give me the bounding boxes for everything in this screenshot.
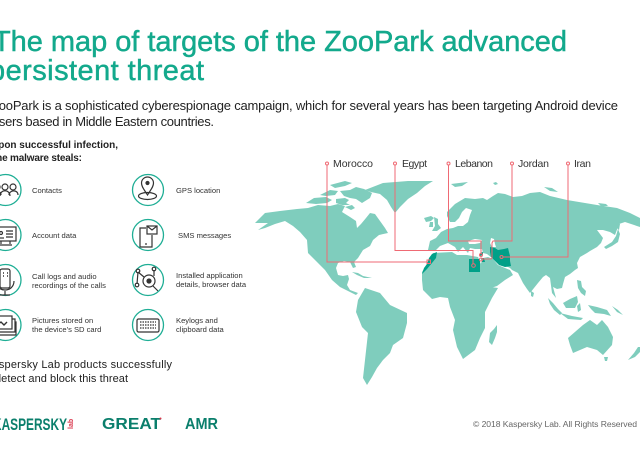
Iceland bbox=[424, 216, 434, 222]
item: keylogs bbox=[132, 310, 224, 340]
item: pictures: the device's SD card bbox=[32, 325, 101, 334]
Africa bbox=[422, 252, 498, 359]
country labels: Egypt bbox=[402, 158, 427, 170]
Arabia bbox=[480, 257, 513, 288]
title: The map of targets of the ZooPark advanced bbox=[0, 26, 567, 58]
item: installed application details: Installed application bbox=[176, 271, 243, 280]
connector: Lebanon bbox=[447, 162, 482, 256]
item: call logs: Call logs and audio bbox=[32, 272, 97, 281]
item: installed application details bbox=[132, 264, 247, 296]
Sri Lanka and Japan bbox=[531, 222, 620, 297]
logo: GREAT: GREAT bbox=[102, 416, 161, 433]
country labels bbox=[333, 158, 591, 170]
world map bbox=[255, 181, 640, 385]
highlighted: Morocco bbox=[422, 252, 437, 274]
item: SMS messages bbox=[132, 220, 231, 250]
item: pictures: Pictures stored on bbox=[32, 316, 93, 325]
item: account data bbox=[0, 220, 77, 250]
item: pictures bbox=[0, 310, 101, 340]
Madagascar bbox=[489, 325, 497, 345]
Greenland bbox=[365, 181, 433, 213]
Black Sea and Caspian bbox=[468, 238, 496, 247]
item: GPS location: GPS location bbox=[176, 186, 220, 195]
item: contacts: Contacts bbox=[32, 186, 62, 195]
highlighted: Egypt bbox=[469, 259, 480, 272]
Caribbean islands bbox=[352, 272, 372, 278]
item: call logs: recordings of the calls bbox=[32, 281, 106, 290]
country labels: Jordan bbox=[518, 158, 549, 170]
item: account data: Account data bbox=[32, 231, 77, 240]
South America bbox=[356, 288, 407, 385]
country labels: Lebanon bbox=[455, 158, 493, 170]
Eurasia bbox=[428, 192, 640, 298]
connector: Iran bbox=[500, 162, 570, 258]
Australia bbox=[568, 320, 613, 355]
highlighted: Lebanon and Jordan bbox=[480, 252, 485, 262]
Canadian Arctic islands bbox=[306, 181, 372, 210]
item: GPS location bbox=[132, 174, 220, 206]
highlighted: Iran bbox=[490, 247, 511, 267]
detection note bbox=[0, 359, 172, 385]
item: contacts bbox=[0, 174, 62, 206]
title bbox=[0, 26, 567, 87]
logo: AMR: AMR bbox=[185, 416, 218, 433]
item: SMS messages: SMS messages bbox=[178, 231, 231, 240]
connector: Jordan bbox=[480, 162, 514, 261]
connector: Egypt bbox=[394, 162, 475, 267]
copyright: © 2018 Kaspersky Lab. All Rights Reserved bbox=[473, 419, 637, 429]
logo: Kaspersky: lab bbox=[68, 419, 75, 429]
Arctic islands north Russia bbox=[451, 182, 608, 206]
item: keylogs: clipboard data bbox=[176, 325, 224, 334]
connector: Morocco bbox=[326, 162, 430, 264]
UK and Ireland bbox=[429, 217, 441, 231]
intro text: ZooPark is a sophisticated cyberespionage campaign, which for several years has been targeting Android device bbox=[0, 98, 618, 113]
item: keylogs: Keylogs and bbox=[176, 316, 218, 325]
intro text bbox=[0, 98, 618, 129]
North America bbox=[255, 204, 388, 295]
subheading bbox=[0, 140, 118, 164]
item: call logs bbox=[0, 264, 106, 296]
SE Asia islands bbox=[548, 280, 623, 320]
country labels: Morocco bbox=[333, 158, 373, 170]
item: installed application details: details, browser data bbox=[176, 280, 247, 289]
country labels: Iran bbox=[574, 158, 591, 170]
Tasmania and New Zealand bbox=[604, 347, 640, 361]
